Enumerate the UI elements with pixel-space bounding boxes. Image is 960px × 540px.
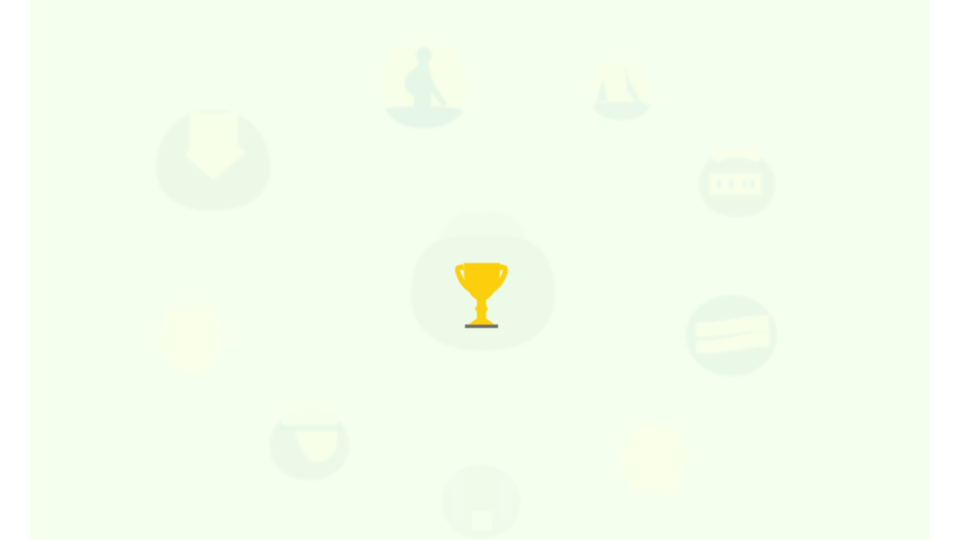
icon: right waves badge <box>686 295 777 376</box>
icon: right building badge <box>699 149 775 217</box>
icon: left yellow circle <box>159 305 223 371</box>
icon: bottom house badge <box>442 465 520 538</box>
icon: central badge <box>411 211 555 351</box>
icon: lower-right yellow circle <box>621 426 687 494</box>
icon: upper-left arrow badge <box>156 110 270 211</box>
icon: meditating figure badge <box>382 43 466 128</box>
icon: lower-left bowl badge <box>270 408 349 480</box>
icon: trophy <box>455 263 508 328</box>
icon: upper-right hills badge <box>592 62 650 120</box>
